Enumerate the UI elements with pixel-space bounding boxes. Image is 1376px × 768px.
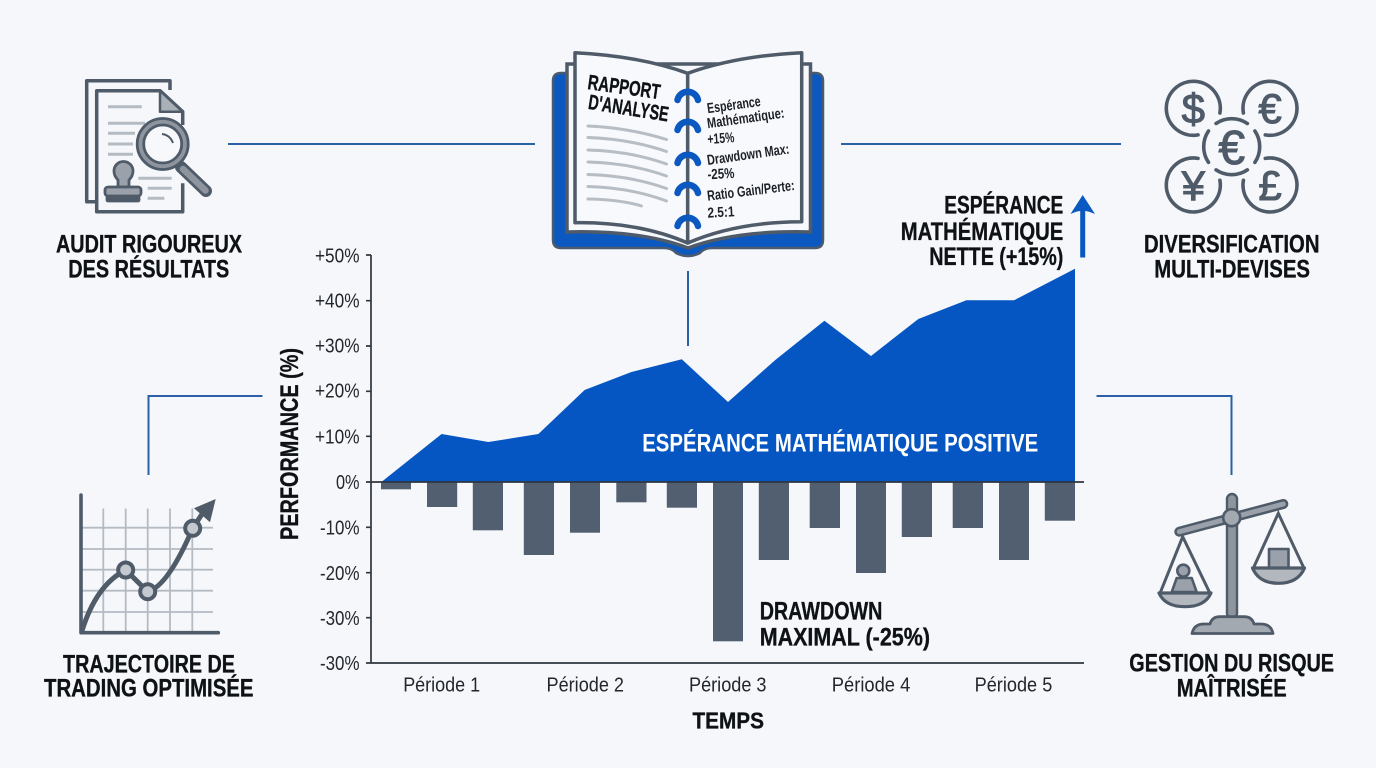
label: risk — [1129, 650, 1334, 703]
curve nodes — [118, 521, 200, 599]
magnifier — [137, 118, 206, 191]
net expectancy callout — [901, 190, 1063, 271]
label: risk: MAÎTRISÉE — [1177, 673, 1287, 703]
net expectancy callout: ESPÉRANCE — [944, 190, 1063, 219]
left page — [575, 53, 688, 243]
connector: report to diversification — [841, 143, 1121, 145]
label: trajectory: TRAJECTOIRE DE — [63, 651, 235, 679]
y axis labels: -30% — [320, 653, 360, 675]
label: diversification — [1144, 230, 1320, 283]
report key figures: Drawdown Max: — [706, 142, 790, 169]
x axis labels — [403, 675, 1052, 697]
bars: drawdowns — [381, 482, 1075, 641]
label: diversification: MULTI-DEVISES — [1154, 255, 1310, 283]
spiral rings — [678, 92, 698, 226]
connector: audit to report — [228, 143, 535, 145]
y axis labels: +10% — [315, 426, 360, 448]
report key figures: Ratio Gain/Perte: — [706, 178, 796, 205]
folded corner — [160, 91, 183, 112]
area label: ESPÉRANCE MATHÉMATIQUE POSITIVE — [642, 429, 1038, 458]
y axis labels: +50% — [315, 246, 360, 268]
net expectancy callout: NETTE (+15%) — [929, 243, 1063, 271]
back pages — [567, 64, 810, 248]
chart: performance over time — [276, 190, 1095, 733]
right page — [688, 53, 802, 243]
currency symbols: € — [1218, 122, 1245, 175]
drawdown callout: DRAWDOWN — [760, 597, 882, 625]
label: diversification: DIVERSIFICATION — [1144, 230, 1320, 258]
weights — [1172, 549, 1288, 592]
icon: optimised trading curve — [81, 495, 218, 633]
connector: report to chart — [687, 271, 689, 346]
beam — [1179, 504, 1283, 532]
arrow: upward trend — [1070, 195, 1095, 258]
report title: D'ANALYSE — [587, 91, 670, 126]
x axis labels: Période 4 — [832, 675, 910, 697]
report key figures — [706, 94, 796, 222]
label: audit — [56, 231, 242, 283]
label: audit: DES RÉSULTATS — [68, 254, 229, 283]
report title: RAPPORT — [586, 71, 662, 104]
report key figures: Mathématique: — [706, 106, 785, 132]
icon: audit document with magnifier and stamp — [87, 81, 206, 212]
connector: chart to risk — [1096, 396, 1232, 475]
icon: open report book — [553, 53, 823, 256]
connector: chart to trajectory — [148, 396, 262, 475]
icon grid — [81, 508, 213, 632]
y axis labels: +30% — [315, 335, 360, 357]
icon axes — [81, 495, 218, 633]
back sheet — [87, 81, 170, 202]
label: trajectory: TRADING OPTIMISÉE — [44, 674, 254, 703]
currency symbols: ¥ — [1181, 162, 1206, 209]
x axis labels: Période 2 — [546, 675, 624, 697]
net expectancy callout: MATHÉMATIQUE — [901, 217, 1063, 246]
y axis labels: -20% — [320, 563, 360, 585]
icon: balance scale — [1159, 494, 1304, 634]
report title — [586, 71, 670, 126]
base — [1192, 617, 1273, 634]
book cover — [553, 73, 823, 256]
x axis labels: Période 5 — [975, 675, 1052, 697]
y axis title: PERFORMANCE (%) — [276, 348, 304, 540]
currency symbols: £ — [1258, 162, 1282, 209]
y axis labels: -10% — [320, 517, 360, 539]
y axis labels: +40% — [315, 291, 360, 313]
stamp — [105, 162, 141, 201]
label: audit: AUDIT RIGOUREUX — [56, 231, 242, 259]
y axis labels: +20% — [315, 381, 360, 403]
front sheet — [97, 91, 183, 212]
drawdown callout — [760, 597, 930, 652]
report key figures: +15% — [707, 130, 735, 148]
x axis title: TEMPS — [692, 707, 764, 733]
document lines — [108, 107, 172, 198]
left page text lines — [588, 126, 666, 206]
label: trajectory — [44, 651, 254, 703]
currency symbols: € — [1258, 85, 1282, 132]
scale strings — [1160, 513, 1304, 593]
currency symbols — [1181, 85, 1282, 209]
coin outlines — [1166, 81, 1297, 212]
icon: currencies — [1166, 81, 1297, 212]
y axis labels: -30% — [320, 608, 360, 630]
hub — [1223, 509, 1240, 526]
y axis labels: 0% — [336, 472, 360, 494]
report key figures: -25% — [707, 166, 735, 183]
curve arrowhead — [194, 499, 216, 522]
area: positive expectancy — [382, 269, 1075, 482]
pans — [1159, 568, 1304, 607]
x axis labels: Période 1 — [403, 675, 480, 697]
x axis labels: Période 3 — [689, 675, 766, 697]
report key figures: 2.5:1 — [707, 204, 735, 222]
post — [1227, 494, 1237, 618]
rising curve — [82, 511, 204, 632]
report key figures: Espérance — [706, 94, 762, 117]
axes and ticks — [366, 255, 1084, 663]
y axis labels — [315, 246, 360, 675]
drawdown callout: MAXIMAL (-25%) — [760, 624, 930, 652]
currency symbols: $ — [1182, 85, 1205, 132]
